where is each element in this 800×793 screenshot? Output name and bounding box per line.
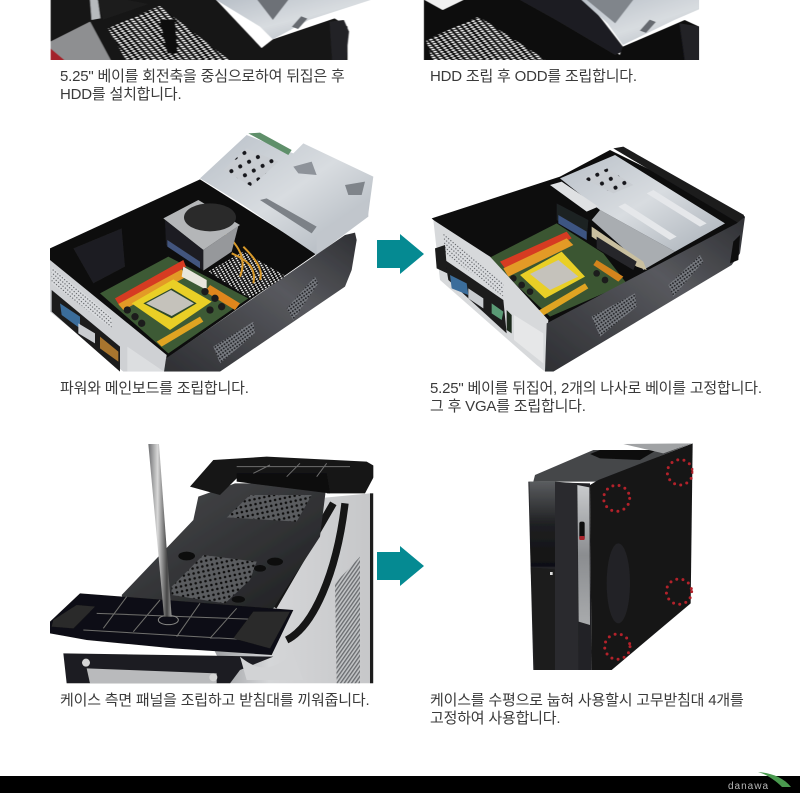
photo: fastening side panel and stand [50, 444, 378, 683]
rear panel with ports [50, 260, 167, 372]
caption: step 1: 5.25" 베이를 회전축을 중심으로하여 뒤집은 후 [60, 68, 345, 85]
caption: step 4 [430, 380, 762, 415]
VGA card [597, 237, 637, 270]
photo: bay flipped for HDD installation [50, 0, 371, 60]
side panel with vents [164, 233, 357, 372]
photo: bay flipped and fastened, VGA installed [432, 147, 745, 372]
caption: step 1: HDD를 설치합니다. [60, 86, 181, 103]
case front [528, 482, 592, 670]
top stand foot [190, 457, 378, 495]
perforated floor [208, 252, 287, 298]
base plate [122, 483, 327, 613]
red dotted markers [604, 460, 693, 659]
duct [73, 228, 125, 283]
caption: step 5: 케이스 측면 패널을 조립하고 받침대를 끼워줍니다. [60, 692, 369, 709]
case side surface [200, 493, 373, 683]
screwdriver [148, 444, 172, 617]
board [488, 223, 627, 322]
bottom stand foot [50, 593, 293, 655]
photo: power supply and mainboard assembly [50, 133, 373, 372]
caption: step 3: 파워와 메인보드를 조립합니다. [60, 380, 249, 397]
top plate [550, 155, 725, 270]
arrow 1: teal step arrow [377, 234, 424, 274]
wires [225, 233, 261, 283]
caption: step 6: 케이스를 수평으로 눕혀 사용할시 고무받침대 4개를 [430, 692, 744, 709]
power supply [163, 200, 240, 271]
photo: ODD assembly after HDD [424, 0, 721, 60]
caption: step 1 [60, 68, 345, 103]
side curved black edge [273, 503, 345, 640]
photo: tower case with four rubber feet marked [528, 443, 693, 670]
case top [533, 443, 692, 482]
side panel [545, 217, 745, 372]
footer logo: danawa swoosh: danawa [728, 781, 769, 792]
case interior [50, 179, 317, 358]
rear panel [433, 220, 548, 372]
rim [613, 147, 744, 225]
case interior [432, 150, 745, 323]
caption: step 4: 그 후 VGA를 조립합니다. [430, 398, 586, 415]
drive bay rotated open [200, 133, 373, 255]
caption: step 4: 5.25" 베이를 뒤집어, 2개의 나사로 베이를 고정합니다. [430, 380, 762, 397]
motherboard [100, 257, 248, 353]
light chassis curve [240, 656, 258, 680]
drive bay front [557, 203, 588, 240]
caption: step 2: HDD 조립 후 ODD를 조립합니다. [430, 68, 637, 85]
case side [590, 443, 693, 670]
footer logo: danawa swoosh [728, 772, 791, 792]
caption: step 6: 고정하여 사용합니다. [430, 710, 560, 727]
arrow 2: teal step arrow [377, 546, 424, 586]
lower chassis [63, 653, 273, 683]
footer bar [0, 776, 800, 793]
caption: step 6 [430, 692, 744, 727]
